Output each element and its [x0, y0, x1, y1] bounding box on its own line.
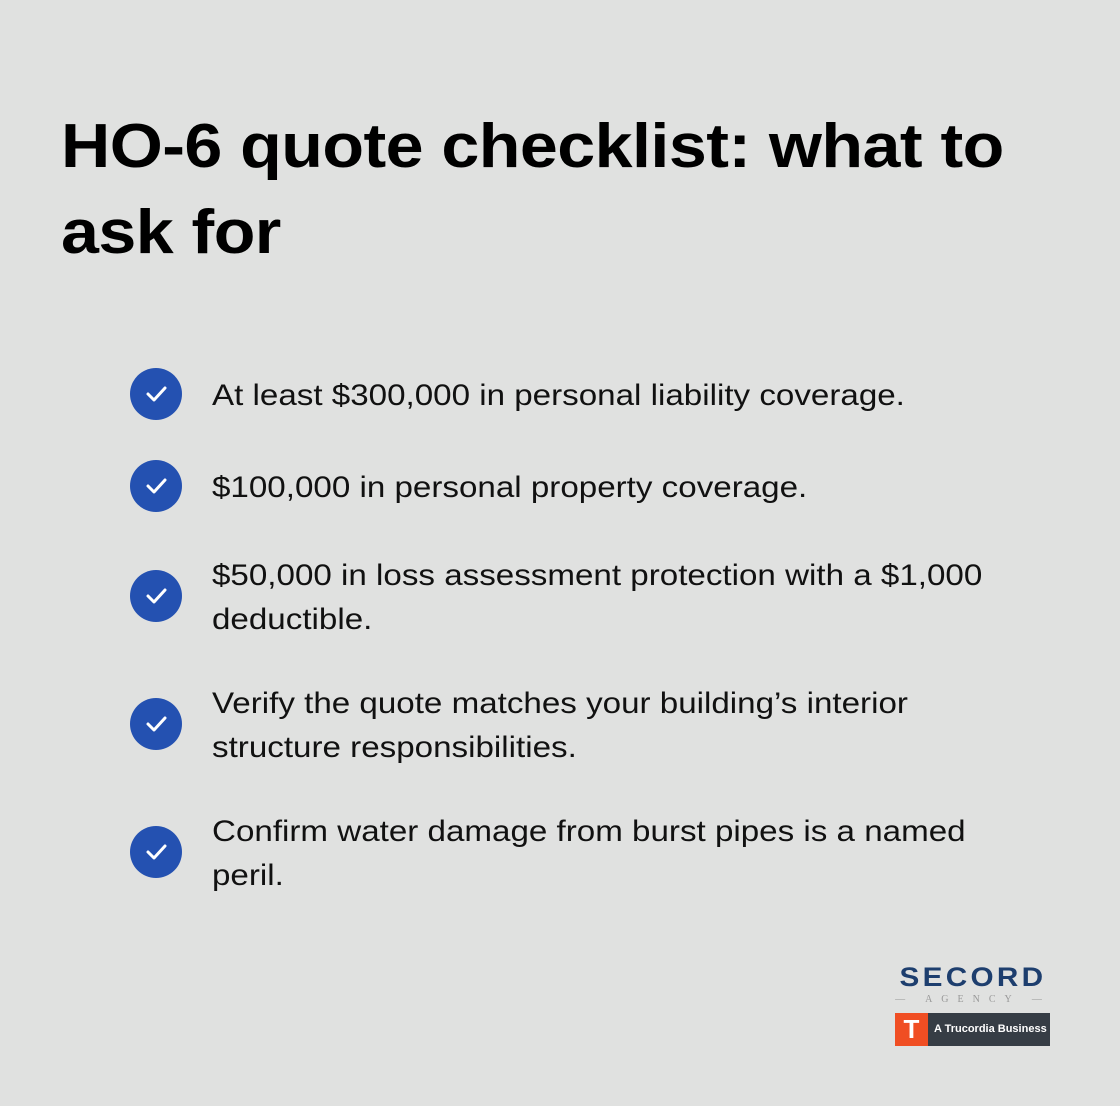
item 1 [130, 368, 182, 420]
item 3 [130, 570, 182, 622]
logo: agency: — AGENCY — [895, 994, 1051, 1005]
text 3: deductible. [212, 603, 372, 636]
text 3 [212, 559, 982, 636]
text 4: structure responsibilities. [212, 731, 577, 764]
item 5 [130, 826, 182, 878]
logo: secord: SECORD [900, 962, 1046, 992]
logo [895, 962, 1051, 1046]
icon: check [130, 826, 182, 878]
icon: check [130, 570, 182, 622]
logo: trucordia badge: A Trucordia Business [934, 1023, 1047, 1035]
text 5 [212, 815, 966, 892]
text 4 [212, 687, 908, 764]
item 4 [130, 698, 182, 750]
logo: trucordia badge: T [904, 1014, 919, 1044]
text 5: Confirm water damage from burst pipes is a named [212, 815, 966, 848]
text 5: peril. [212, 859, 284, 892]
icon: check [130, 698, 182, 750]
icon: check [130, 368, 182, 420]
item 2 [130, 460, 182, 512]
title [61, 112, 1004, 267]
title: ask for [61, 198, 281, 267]
icon: check [130, 460, 182, 512]
text 4: Verify the quote matches your building’s interior [212, 687, 908, 720]
text 2: $100,000 in personal property coverage. [212, 471, 807, 504]
logo: trucordia badge [895, 1013, 1050, 1046]
text 1: At least $300,000 in personal liability coverage. [212, 379, 905, 412]
text 3: $50,000 in loss assessment protection with a $1,000 [212, 559, 982, 592]
title: HO-6 quote checklist: what to [61, 112, 1004, 181]
